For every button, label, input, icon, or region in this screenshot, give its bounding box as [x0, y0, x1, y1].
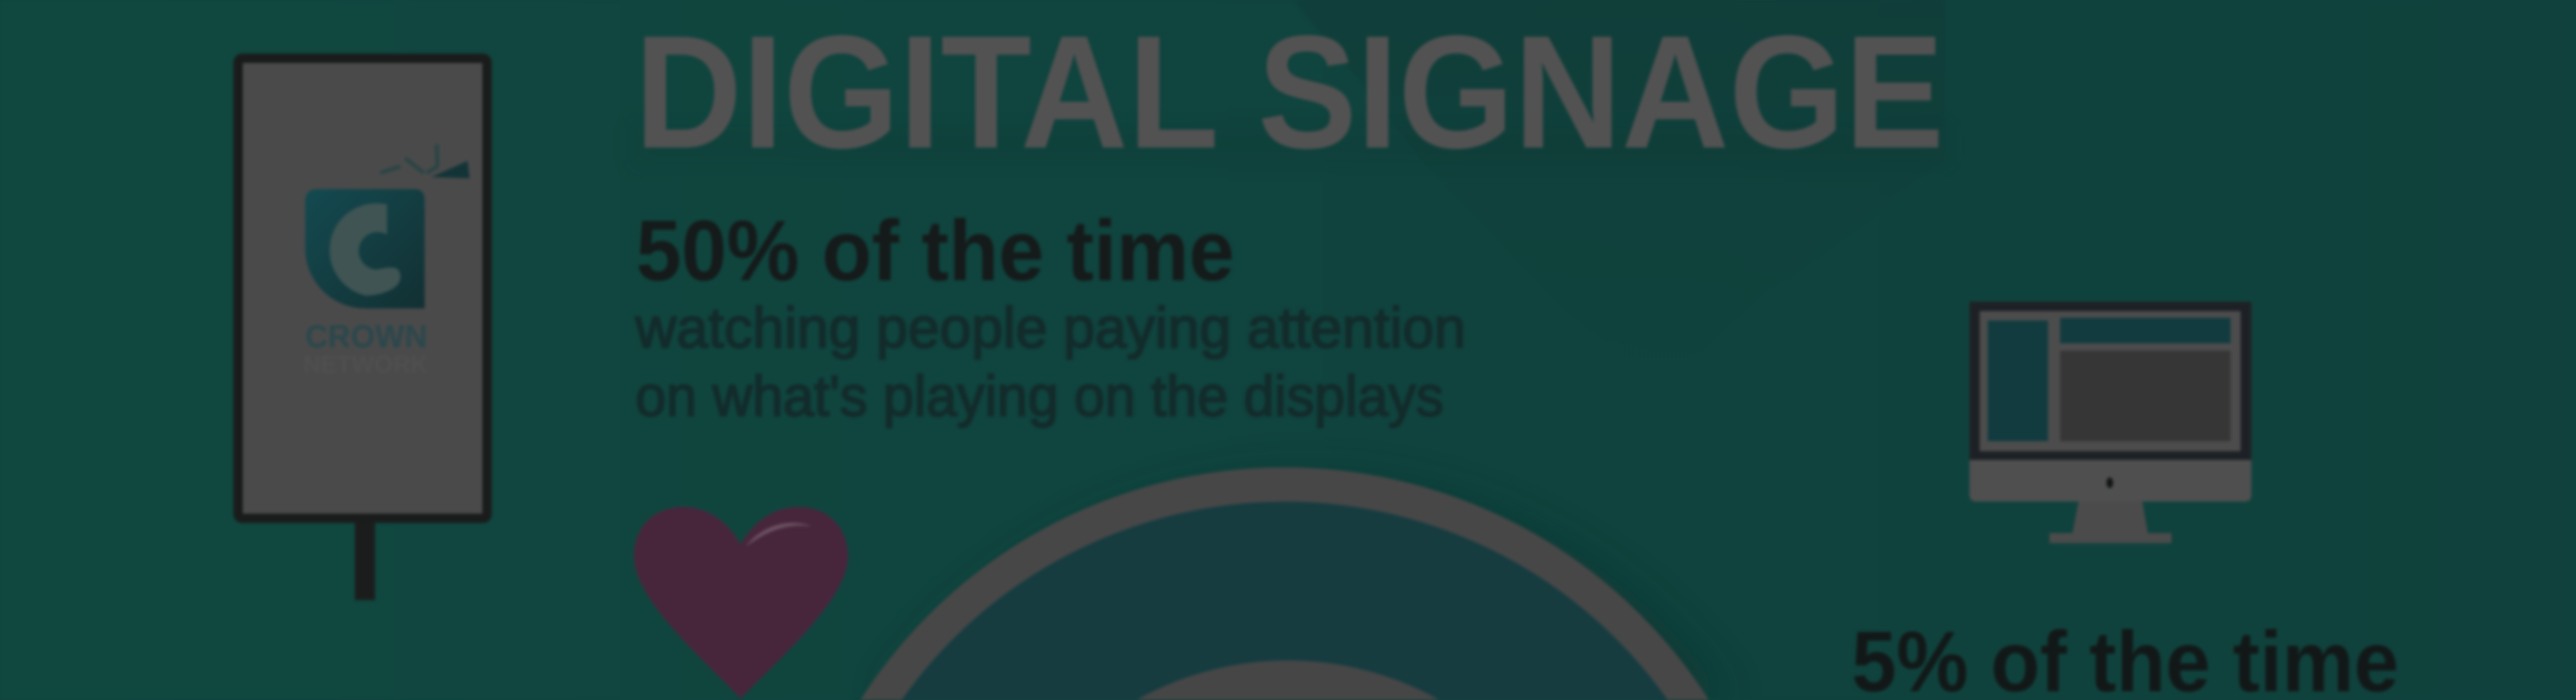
heart highlight — [746, 523, 812, 546]
icon: crown mark — [380, 144, 470, 178]
stat: 50% description — [635, 296, 1466, 428]
digital sign display — [238, 58, 487, 600]
monitor stand base — [2049, 533, 2171, 543]
stat: 50% heading: 50% of the time — [636, 203, 1234, 299]
monitor bezel — [1970, 302, 2251, 460]
stat: 50% description: on what's playing on the displays — [635, 365, 1444, 428]
middle ring — [902, 502, 1668, 700]
sign screen — [238, 58, 487, 518]
inner circle — [1136, 660, 1440, 700]
screen sidebar — [1988, 320, 2048, 441]
icon: crown logo — [305, 189, 425, 308]
target shadow — [883, 477, 1727, 700]
logo tagline: NETWORK — [303, 351, 428, 378]
title: DIGITAL SIGNAGE — [635, 2, 1944, 182]
sign pole — [355, 520, 375, 600]
outer ring — [860, 467, 1709, 700]
logo wordmark: CROWN — [305, 319, 427, 355]
target chart — [860, 467, 1727, 700]
background shadow wedge — [1295, 0, 1945, 386]
title shadow — [637, 127, 1945, 161]
stat: 50% description: watching people paying attention — [635, 296, 1466, 360]
monitor stand neck — [2072, 500, 2148, 534]
monitor screen — [1980, 311, 2241, 451]
monitor camera dot — [2106, 477, 2113, 488]
icon: desktop monitor — [1970, 302, 2251, 543]
monitor chin — [1970, 460, 2251, 502]
screen content — [2060, 351, 2231, 441]
screen header — [2060, 318, 2231, 343]
icon: heart — [634, 507, 848, 699]
